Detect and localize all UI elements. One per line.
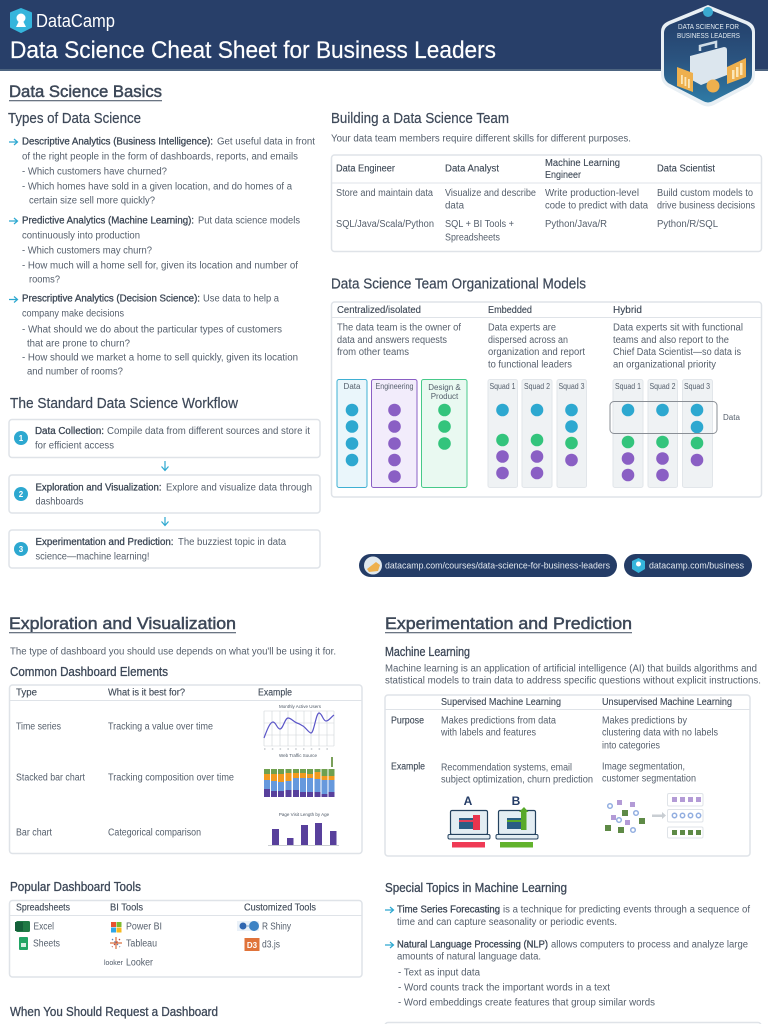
text block: natural language processing: - Word embeddings create features that group similar words: [398, 998, 655, 1008]
workflow step 3: Experimentation and Prediction:: [36, 537, 174, 548]
icon: Tableau: [110, 937, 122, 949]
text block: descriptive analytics: - Which homes have sold in a given location, and do homes of a: [22, 182, 292, 192]
model: hybrid: [610, 305, 743, 488]
table: supervised vs unsupervised: subject optimization, churn prediction: [441, 774, 593, 786]
icon: Sheets: [19, 937, 28, 950]
workflow step 3: The buzziest topic in data: [178, 537, 286, 548]
table: dashboard tools: d3.js: [262, 940, 280, 950]
text block: natural language processing: [385, 940, 748, 1008]
model: centralized: [337, 305, 467, 488]
model: embedded: to functional leaders: [488, 360, 572, 370]
table: supervised vs unsupervised: Makes predictions by: [602, 716, 687, 726]
table: data team roles: drive business decisions: [657, 200, 755, 212]
text block: natural language processing: - Text as input data: [398, 968, 480, 978]
table: supervised vs unsupervised: customer segmentation: [602, 774, 696, 784]
table: data team roles: Data Scientist: [657, 164, 715, 174]
icon: arrow: [9, 218, 18, 224]
icon: A/B test laptops: A: [464, 794, 473, 808]
link pill: course: [359, 554, 617, 577]
table: data team roles: SQL + BI Tools +: [445, 219, 514, 230]
table: dashboard elements: Time series: [16, 722, 61, 732]
text block: predictive analytics: [9, 216, 300, 286]
text block: descriptive analytics: Get useful data in front: [217, 136, 315, 148]
table: supervised vs unsupervised: with labels and features: [440, 728, 536, 738]
text block: descriptive analytics: Descriptive Analytics (Business Intelligence):: [22, 136, 213, 148]
heading: when to request a dashboard: When You Should Request a Dashboard: [10, 1005, 218, 1019]
table: supervised vs unsupervised: Supervised Machine Learning: [441, 697, 561, 708]
table: dashboard tools: Spreadsheets: [16, 902, 70, 914]
table: data team roles: Build custom models to: [657, 188, 753, 199]
text block: predictive analytics: continuously into production: [22, 230, 140, 242]
table: data team roles: code to predict with data: [545, 200, 648, 212]
table: data team roles: Engineer: [545, 170, 582, 181]
model: centralized: from other teams: [337, 347, 409, 358]
workflow step 2: 2: [19, 490, 24, 499]
chart: time series: Monthly Active Users: [279, 704, 322, 709]
team intro: Your data team members require different skills for different purposes.: [331, 134, 631, 144]
table: dashboard tools: Excel: [34, 922, 54, 932]
model: embedded: organization and report: [488, 347, 585, 358]
text block: descriptive analytics: of the right people in the form of dashboards, reports, and emails: [22, 152, 298, 162]
table: dashboard elements: Tracking a value over time: [108, 722, 213, 732]
heading: Building a Data Science Team: Building a Data Science Team: [331, 111, 509, 127]
table: dashboard elements: Tracking composition over time: [108, 772, 234, 784]
link pill: course: datacamp.com/courses/data-science-for-business-leaders: [385, 560, 610, 572]
workflow step 2: Exploration and Visualization:: [36, 482, 162, 494]
model: embedded: Squad 3: [558, 382, 585, 391]
table: dashboard elements: Example: [258, 688, 292, 698]
icon: DataCamp logo: [11, 9, 31, 32]
heading: machine learning: Machine Learning: [385, 645, 470, 659]
model: centralized: The data team is the owner of: [337, 322, 461, 334]
badge: DATA SCIENCE FOR: [678, 24, 739, 31]
model: centralized: Data: [344, 382, 361, 391]
model: centralized: Engineering: [376, 382, 414, 391]
model: embedded: Squad 2: [524, 382, 550, 391]
text block: prescriptive analytics: and number of rooms?: [27, 366, 123, 378]
model: hybrid: Squad 1: [615, 382, 641, 391]
table: dashboard tools: R Shiny: [262, 922, 291, 932]
icon: Power BI: [111, 922, 122, 932]
table: dashboard elements: What is it best for?: [108, 688, 185, 698]
model: centralized: Centralized/isolated: [337, 305, 421, 316]
model: hybrid: Chief Data Scientist—so data is: [613, 347, 741, 358]
chart: stacked bar: Web Traffic Source: [279, 753, 318, 758]
workflow step 3: science—machine learning!: [36, 552, 150, 562]
table: supervised vs unsupervised: Recommendation systems, email: [441, 762, 572, 774]
model: embedded: Embedded: [488, 305, 532, 316]
table: supervised vs unsupervised: Makes predictions from data: [441, 716, 556, 726]
table: dashboard elements: Bar chart: [16, 828, 52, 838]
workflow step 2: dashboards: [36, 496, 84, 508]
table: dashboard tools: Looker: [126, 958, 154, 968]
panel: cropped bottom table: [385, 1022, 761, 1024]
model: centralized: Design &: [428, 383, 461, 392]
table: dashboard elements: Categorical comparison: [108, 828, 201, 838]
model: embedded: Data experts are: [488, 322, 556, 334]
model: embedded: Squad 1: [490, 382, 516, 391]
table: data team roles: Python/Java/R: [545, 219, 607, 230]
table: supervised vs unsupervised: [385, 695, 750, 856]
text block: time series forecasting: is a technique for predicting events through a sequence of: [503, 904, 750, 916]
workflow step 2: Explore and visualize data through: [166, 482, 312, 494]
text block: prescriptive analytics: Prescriptive Analytics (Decision Science):: [22, 294, 200, 304]
text block: prescriptive analytics: Use data to help a: [203, 294, 279, 304]
text block: descriptive analytics: certain size sell more quickly?: [29, 196, 155, 206]
text block: natural language processing: allows computers to process and analyze large: [551, 940, 748, 950]
section heading: Experimentation and Prediction: Experimentation and Prediction: [385, 614, 632, 633]
text block: natural language processing: amounts of natural language data.: [397, 952, 541, 962]
arrow: step 2 to 3: [162, 517, 168, 526]
table: dashboard tools: Customized Tools: [244, 902, 316, 914]
workflow step 1: 1: [19, 434, 24, 443]
icon: R Shiny: [237, 921, 259, 931]
table: data team roles: Spreadsheets: [445, 232, 500, 244]
icon: Excel: [15, 921, 30, 932]
text block: descriptive analytics: - Which customers have churned?: [22, 166, 167, 178]
workflow step 1: for efficient access: [35, 440, 114, 452]
table: supervised vs unsupervised: Unsupervised Machine Learning: [602, 697, 732, 708]
table: dashboard tools: [10, 900, 362, 977]
table: data team roles: Machine Learning: [545, 158, 620, 169]
table: data team roles: Python/R/SQL: [657, 219, 718, 230]
table: data team roles: Visualize and describe: [445, 188, 536, 199]
heading: workflow: The Standard Data Science Workflow: [10, 396, 238, 412]
text block: natural language processing: Natural Language Processing (NLP): [397, 940, 548, 950]
text block: predictive analytics: Put data science models: [198, 216, 300, 226]
model: hybrid: Squad 3: [684, 382, 710, 391]
icon: arrow: [385, 907, 394, 913]
text block: prescriptive analytics: [9, 294, 298, 378]
text block: machine learning definition: Machine learning is an application of artificial intelligence (AI) that builds algorithms and: [385, 664, 757, 674]
panel: organizational models: [332, 302, 762, 497]
heading: popular dashboard tools: Popular Dashboard Tools: [10, 880, 141, 894]
workflow step 3: 3: [19, 545, 24, 554]
chart: stacked bar: [264, 753, 334, 797]
table: data team roles: SQL/Java/Scala/Python: [336, 219, 434, 230]
text block: prescriptive analytics: company make decisions: [22, 308, 124, 320]
icon: d3.js: [244, 938, 260, 951]
model: centralized: Product: [431, 392, 459, 401]
table: data team roles: [332, 155, 762, 252]
table: dashboard elements: [10, 685, 362, 854]
badge: BUSINESS LEADERS: [677, 33, 740, 40]
model: embedded: [488, 305, 586, 488]
model: hybrid: Squad 2: [650, 382, 676, 391]
heading: Types of Data Science: Types of Data Science: [8, 111, 141, 127]
arrow: step 1 to 2: [162, 461, 168, 470]
table: dashboard tools: BI Tools: [110, 902, 143, 914]
link pill: business: datacamp.com/business: [649, 560, 744, 572]
text block: prescriptive analytics: that are prone to churn?: [27, 338, 130, 350]
section heading: Exploration and Visualization: Exploration and Visualization: [9, 614, 236, 633]
chart: bar: Page Visit Length by Age: [279, 812, 330, 817]
text block: predictive analytics: - How much will a home sell for, given its location and number of: [22, 260, 298, 272]
text block: natural language processing: - Word counts track the important words in a text: [398, 982, 610, 994]
header banner: [0, 0, 768, 71]
icon: d3.js: D3: [247, 941, 258, 950]
text block: machine learning definition: [385, 664, 761, 686]
icon: arrow: [9, 296, 18, 302]
model: centralized: data and answers requests: [337, 335, 447, 346]
workflow step 1: Compile data from different sources and store it: [107, 426, 310, 437]
model: hybrid: Data experts sit with functional: [613, 322, 743, 334]
workflow step 2: [9, 475, 320, 513]
text block: descriptive analytics: [9, 136, 315, 206]
workflow step 3: [9, 530, 320, 568]
heading: common dashboard elements: Common Dashboard Elements: [10, 665, 168, 679]
model: hybrid: Data: [723, 413, 740, 422]
text block: time series forecasting: [385, 904, 750, 928]
icon: A/B test laptops: [448, 794, 538, 848]
icon: clustering diagram: [605, 794, 703, 838]
text block: time series forecasting: time and can capture seasonality or periodic events.: [397, 917, 617, 928]
text block: time series forecasting: Time Series Forecasting: [397, 904, 500, 916]
text block: predictive analytics: - Which customers may churn?: [22, 246, 152, 256]
brand name: DataCamp: [36, 11, 115, 31]
table: data team roles: Data Analyst: [445, 164, 499, 174]
heading: special topics: Special Topics in Machine Learning: [385, 881, 567, 895]
text block: predictive analytics: rooms?: [29, 274, 60, 286]
model: hybrid: an organizational priority: [613, 360, 716, 370]
table: dashboard elements: Stacked bar chart: [16, 772, 85, 784]
badge: [661, 5, 755, 106]
model: hybrid: teams and also report to the: [613, 335, 729, 346]
text block: machine learning definition: statistical models to train data to address specific questions without explicit instructions.: [385, 676, 761, 686]
section heading: Data Science Basics: Data Science Basics: [9, 82, 162, 101]
text block: prescriptive analytics: - How should we market a home to sell quickly, given its location: [22, 352, 298, 364]
chart: bar: [268, 812, 339, 846]
heading: organizational models: Data Science Team Organizational Models: [331, 276, 586, 292]
model: embedded: dispersed across an: [488, 335, 568, 346]
table: supervised vs unsupervised: Image segmentation,: [602, 762, 685, 772]
text block: predictive analytics: Predictive Analytics (Machine Learning):: [22, 216, 194, 226]
table: dashboard tools: Power BI: [126, 922, 162, 932]
model: hybrid: Hybrid: [613, 305, 642, 316]
icon: A/B test laptops: B: [512, 794, 521, 808]
table: dashboard tools: Tableau: [126, 938, 157, 950]
table: data team roles: data: [445, 200, 464, 212]
table: supervised vs unsupervised: Example: [391, 762, 425, 772]
chart: time series: [264, 704, 334, 749]
table: data team roles: Store and maintain data: [336, 188, 433, 199]
link pill: business: [624, 554, 752, 577]
text block: prescriptive analytics: - What should we do about the particular types of customers: [22, 324, 282, 336]
table: dashboard elements: Type: [16, 688, 37, 698]
dashboard intro: The type of dashboard you should use depends on what you'll be using it for.: [10, 646, 336, 658]
table: dashboard tools: Sheets: [33, 938, 60, 950]
workflow step 1: [9, 420, 320, 458]
table: data team roles: Write production-level: [545, 188, 639, 199]
logo: Looker: looker: [104, 960, 124, 967]
table: supervised vs unsupervised: clustering data with no labels: [602, 728, 718, 738]
icon: arrow: [9, 139, 18, 145]
icon: arrow: [385, 942, 394, 948]
title: Data Science Cheat Sheet for Business Leaders: [10, 37, 496, 64]
table: supervised vs unsupervised: into categories: [602, 740, 660, 752]
table: data team roles: Data Engineer: [336, 164, 396, 174]
table: supervised vs unsupervised: Purpose: [391, 716, 424, 726]
workflow step 1: Data Collection:: [35, 426, 104, 437]
